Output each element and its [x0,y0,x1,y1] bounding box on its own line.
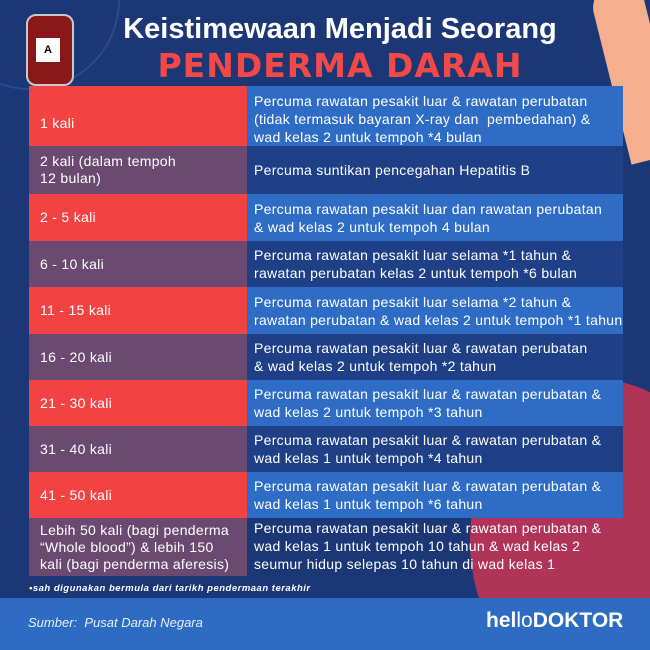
row 2: 12 bulan) [40,170,101,186]
title: Keistimewaan Menjadi Seorang [123,13,557,45]
row 3: & wad kelas 2 untuk tempoh 4 bulan [254,218,490,234]
row 3: Percuma rawatan pesakit luar dan rawatan perubatan [254,200,602,216]
title: PENDERMA DARAH [157,46,523,85]
row 1: 1 kali [40,114,74,130]
row 10: wad kelas 1 untuk tempoh 10 tahun & wad kelas 2 [254,538,580,554]
row 3 [29,194,623,241]
row 2 [29,146,623,194]
row 5: rawatan perubatan & wad kelas 2 untuk tempoh *1 tahun [254,312,622,328]
row 9: wad kelas 1 untuk tempoh *6 tahun [254,496,483,512]
row 7 [29,380,623,426]
row 8: Percuma rawatan pesakit luar & rawatan perubatan & [254,432,601,448]
row 1 [29,86,623,146]
row 7: Percuma rawatan pesakit luar & rawatan perubatan & [254,386,601,402]
icon: blood bag [26,14,74,86]
footnote: •sah digunakan bermula dari tarikh pendermaan terakhir [29,583,311,594]
row 10: seumur hidup selepas 10 tahun di wad kelas 1 [254,556,555,572]
row 3: 2 - 5 kali [40,209,96,225]
row 1: wad kelas 2 untuk tempoh *4 bulan [254,129,482,145]
row 1: Percuma rawatan pesakit luar & rawatan perubatan [254,93,587,109]
row 6 [29,334,623,380]
row 8 [29,426,623,472]
row 1: (tidak termasuk bayaran X-ray dan pembedahan) & [254,111,591,127]
row 10: Percuma rawatan pesakit luar & rawatan perubatan & [254,520,601,536]
row 8: 31 - 40 kali [40,440,112,456]
icon: blood bag: A [44,44,52,56]
row 8: wad kelas 1 untuk tempoh *4 tahun [254,450,483,466]
row 4: Percuma rawatan pesakit luar selama *1 tahun & [254,247,571,263]
row 4: rawatan perubatan kelas 2 untuk tempoh *6 bulan [254,265,577,281]
row 2: Percuma suntikan pencegahan Hepatitis B [254,162,530,178]
row 7: wad kelas 2 untuk tempoh *3 tahun [254,404,483,420]
row 10: Lebih 50 kali (bagi penderma [40,522,229,538]
row 6: 16 - 20 kali [40,348,112,364]
icon: arm [593,0,650,165]
row 9: 41 - 50 kali [40,486,112,502]
row 9: Percuma rawatan pesakit luar & rawatan perubatan & [254,478,601,494]
row 10 [29,518,601,576]
row 7: 21 - 30 kali [40,394,112,410]
row 10: kali (bagi penderma aferesis) [40,556,229,572]
row 5 [29,287,623,334]
row 4: 6 - 10 kali [40,256,104,272]
row 10: “Whole blood”) & lebih 150 [40,538,214,554]
row 5: 11 - 15 kali [40,302,111,318]
row 9 [29,472,623,518]
row 2: 2 kali (dalam tempoh [40,153,176,169]
logo: helloDOKTOR [486,609,623,632]
row 6: & wad kelas 2 untuk tempoh *2 tahun [254,358,496,374]
row 5: Percuma rawatan pesakit luar selama *2 tahun & [254,294,571,310]
title [123,13,557,85]
row 4 [29,241,623,287]
footer bar [0,598,650,650]
row 6: Percuma rawatan pesakit luar & rawatan perubatan [254,340,587,356]
source: Sumber: Pusat Darah Negara [28,615,203,630]
